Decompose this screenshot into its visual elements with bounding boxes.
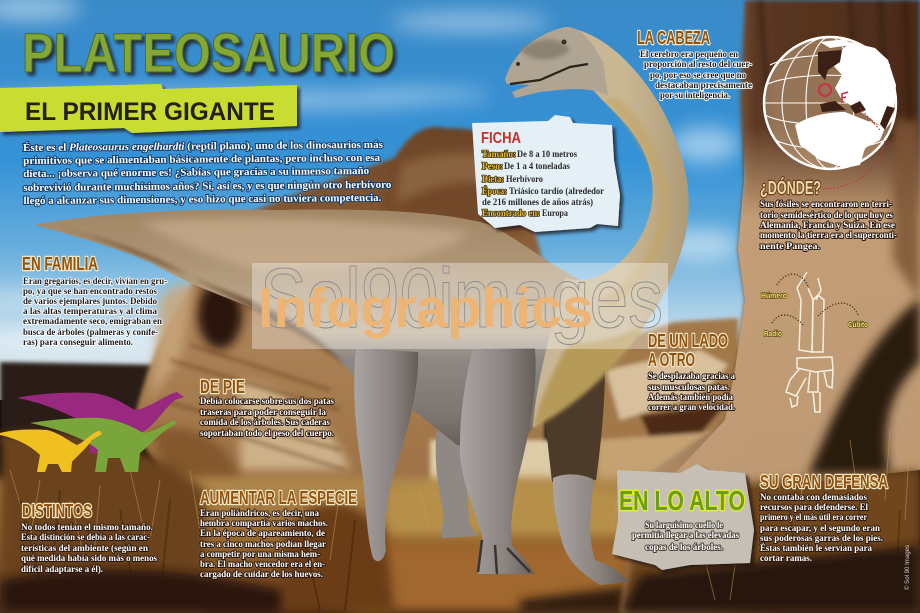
- panel: en familia: [22, 254, 167, 348]
- panel: la cabeza: po, por eso se cree que no: [650, 70, 746, 81]
- arm bones diagram: [761, 272, 868, 412]
- dinosaur: right front leg: [545, 365, 628, 585]
- intro text: [23, 139, 391, 207]
- dinosaur: body and tail: [35, 210, 640, 455]
- panel: su gran defensa: No contaba con demasiados: [760, 492, 867, 503]
- panel: distintos: [21, 501, 157, 575]
- background: central rock formation: [135, 127, 545, 500]
- panel: su gran defensa: primero y el más útil era correr: [760, 512, 868, 523]
- panel: en familia: de varios ejemplares juntos. Debido: [23, 296, 157, 307]
- dinosaur: back highlight: [140, 218, 470, 270]
- globe map: [764, 37, 896, 169]
- silhouette: yellow: [0, 429, 102, 472]
- panel: de pie: Debía colocarse sobre sus dos patas: [200, 396, 334, 407]
- panel: de un lado a otro: A OTRO: [648, 350, 695, 370]
- panel: en familia: EN FAMILIA: [22, 254, 98, 274]
- panel: la cabeza: por su inteligencia.: [660, 90, 730, 101]
- panel: aumentar la especie: tres a cinco machos podían llegar: [200, 539, 327, 550]
- watermark: Infographics: [258, 276, 593, 339]
- panel: en lo alto: permitía llegar a las elevadas: [632, 530, 739, 541]
- globe: dark land gaps: [818, 50, 895, 130]
- panel: ficha: de 216 millones de años atrás): [482, 197, 593, 208]
- panel: donde: Alemania, Francia y Suiza. En ese: [760, 220, 896, 231]
- panel: en familia: a las altas temperaturas y al clima: [23, 306, 157, 317]
- panel: de pie: traseras para poder conseguir la: [200, 407, 326, 418]
- globe: ocean and grid: [764, 37, 896, 169]
- label: radio: Radio: [764, 329, 782, 338]
- panel: su gran defensa: para escapar, y el segundo eran: [760, 523, 881, 534]
- background: distant treeline: [0, 362, 170, 445]
- dinosaur: tail underside shade: [60, 228, 345, 365]
- dinosaur: far hind leg: [436, 430, 478, 538]
- panel: de un lado a otro: correr a gran velocidad.: [648, 402, 735, 413]
- panel: la cabeza: proporción al resto del cuer-: [644, 59, 752, 70]
- watermark: Sol90images: [260, 251, 663, 345]
- panel: de pie: DE PIE: [200, 377, 245, 397]
- panel: aumentar la especie: bra. El macho vencedor era el en-: [200, 559, 325, 570]
- panel: su gran defensa: sus poderosas garras de los pies.: [760, 533, 883, 544]
- panel: distintos: terísticas del ambiente (según en: [21, 543, 149, 554]
- panel: de un lado a otro: [648, 331, 735, 413]
- bone leader lines: [772, 274, 858, 325]
- dotted connector: [823, 108, 885, 189]
- credit: © Sol 90 Images: [904, 545, 911, 590]
- panel: de pie: soportaban todo el peso del cuerpo.: [200, 428, 334, 439]
- panel: ficha: [472, 115, 620, 232]
- panel: distintos: No todos tenían el mismo tamaño.: [21, 522, 153, 533]
- panel: donde: momento la tierra era el superconti-: [760, 230, 897, 241]
- globe: location marker: [819, 84, 848, 103]
- panel: aumentar la especie: AUMENTAR LA ESPECIE: [200, 488, 357, 508]
- panel: ficha: De 1 a 4 toneladas: [504, 162, 570, 172]
- intro text: llegó a alcanzar sus dimensiones, y eso hizo que casi no tuviera competencia.: [23, 193, 382, 207]
- intro text: primitivos que se alimentaban básicamente de plantas, pero incluso con esa: [23, 153, 381, 167]
- title: PLATEOSAURIO: [22, 21, 395, 84]
- panel: en lo alto: [612, 464, 754, 570]
- panel: ficha: De 8 a 10 metros: [517, 150, 577, 160]
- panel: su gran defensa: cortar ramas.: [760, 553, 812, 564]
- panel: la cabeza: El cerebro era pequeño en: [640, 49, 739, 60]
- background: sky: [0, 0, 920, 400]
- background: right distant rock: [430, 318, 745, 520]
- panel: de un lado a otro: sus musculosas patas.: [648, 382, 730, 393]
- panel: en familia: extremadamente seco, emigraban en: [23, 316, 163, 327]
- panel: de pie: comida de los árboles. Sus caderas: [200, 417, 330, 428]
- dinosaur: neck: [533, 28, 689, 428]
- panel: la cabeza: [637, 28, 753, 101]
- dinosaur: centre front leg: [460, 348, 536, 574]
- intro text: Éste es el Plateosaurus engelhardti (reptil plano), uno de los dinosaurios más: [23, 139, 383, 154]
- panel: distintos: Esta distinción se debía a las carac-: [21, 532, 150, 543]
- panel: su gran defensa: [760, 472, 888, 564]
- panel: de pie: [200, 377, 334, 439]
- panel: ficha: Dieta:: [482, 175, 504, 185]
- panel: ficha: Peso:: [482, 162, 503, 172]
- panel: de un lado a otro: Se desplazaba gracias a: [648, 371, 735, 382]
- panel: de un lado a otro: DE UN LADO: [648, 331, 728, 351]
- subtitle tape: [0, 84, 297, 133]
- panel: ficha: Triásico tardío (alrededor: [509, 186, 604, 197]
- subtitle tape: EL PRIMER GIGANTE: [25, 98, 275, 126]
- panel: distintos: DISTINTOS: [22, 501, 92, 521]
- panel: donde: torio semidesértico de lo que hoy es: [760, 210, 893, 221]
- intro text: dieta... ¡observa qué enorme es! ¿Sabías que gracias a su inmenso tamaño: [23, 166, 369, 180]
- panel: aumentar la especie: cargado de cuidar de los huevos.: [200, 569, 323, 580]
- panel: distintos: qué medida había sido más o menos: [21, 553, 157, 564]
- panel: ficha: FICHA: [481, 130, 521, 147]
- panel: su gran defensa: recursos para defenderse. El: [760, 502, 868, 513]
- panel: aumentar la especie: En la época de apareamiento, de: [200, 528, 326, 539]
- panel: ficha: Tamaño:: [482, 150, 516, 160]
- label: humero: Húmero: [761, 291, 787, 300]
- panel: ficha: Europa: [542, 209, 568, 219]
- panel: ficha: Época:: [482, 185, 507, 197]
- panel: de un lado a otro: Además también podía: [648, 392, 733, 403]
- panel: donde: Sus fósiles se encontraron en terri-: [760, 199, 892, 210]
- background: ground: [0, 432, 780, 613]
- panel: aumentar la especie: a competir por una misma hem-: [200, 549, 320, 560]
- dinosaur: head: [505, 27, 608, 98]
- globe: land: [795, 39, 896, 168]
- panel: aumentar la especie: Eran poliándricos, es decir, una: [200, 508, 319, 519]
- panel: ficha: Encontrado en:: [482, 209, 540, 219]
- panel: en familia: busca de árboles (palmeras y conífe-: [23, 327, 158, 338]
- dinosaur illustration: [35, 27, 689, 585]
- panel: la cabeza: destacaban precisamente: [655, 80, 753, 91]
- panel: donde: nente Pangea.: [760, 241, 820, 252]
- label: cubito: Cúbito: [848, 320, 868, 329]
- panel: aumentar la especie: [200, 488, 357, 580]
- panel: en lo alto: copas de los árboles.: [645, 542, 723, 553]
- silhouette: green: [30, 418, 176, 472]
- dinosaur: left hind leg: [354, 348, 418, 561]
- bones: [786, 272, 833, 412]
- panel: ficha: Herbívoro: [506, 175, 543, 185]
- panel: en familia: po, ya que se han encontrado restos: [23, 286, 157, 297]
- panel: donde: [760, 177, 897, 252]
- silhouettes: three dinosaur sizes: [0, 392, 184, 472]
- panel: en lo alto: Su larguísimo cuello le: [645, 520, 724, 531]
- panel: su gran defensa: Éstas también le servían para: [760, 542, 872, 554]
- silhouette: purple: [17, 392, 184, 453]
- panel: en lo alto: EN LO ALTO: [619, 485, 745, 516]
- background: right cliff: [620, 0, 920, 613]
- intro text: sobrevivió durante muchísimos años? Sí, así es, y es que ningún otro herbívoro: [23, 180, 391, 194]
- panel: en familia: ras) para conseguir alimento.: [23, 337, 133, 348]
- panel: distintos: difícil adaptarse a él).: [21, 564, 103, 575]
- panel: donde: ¿DÓNDE?: [760, 177, 821, 198]
- panel: la cabeza: LA CABEZA: [637, 28, 710, 48]
- background: dry grass strokes: [10, 430, 910, 610]
- panel: en familia: Eran gregarios, es decir, vivían en gru-: [23, 276, 167, 287]
- panel: aumentar la especie: hembra compartía varios machos.: [200, 518, 328, 529]
